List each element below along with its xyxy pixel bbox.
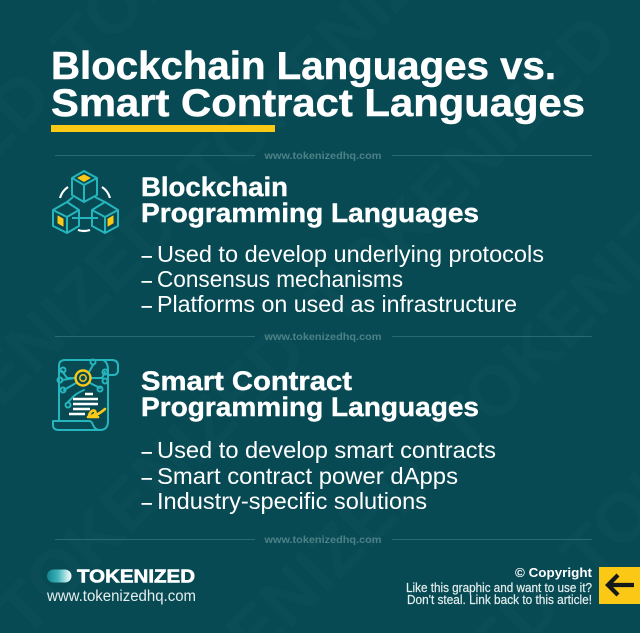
text block: blockchain bullets: Platforms on used as infrastructure <box>157 291 517 317</box>
text block: blockchain bullets: Used to develop underlying protocols <box>157 241 544 267</box>
heading: blockchain programming languages: Programming Languages <box>141 198 479 228</box>
copyright notice <box>406 565 593 607</box>
title: Blockchain Languages vs. <box>51 45 556 88</box>
heading: smart contract programming languages <box>141 366 479 422</box>
title underline <box>51 125 275 132</box>
heading: blockchain programming languages <box>141 172 479 228</box>
heading: smart contract programming languages: Programming Languages <box>141 392 479 422</box>
heading: smart contract programming languages: Smart Contract <box>141 366 352 396</box>
text block: blockchain bullets: Consensus mechanisms <box>157 266 403 292</box>
icon: logo mark <box>47 570 72 582</box>
text block: smart contract bullets <box>142 437 496 514</box>
icon: connected blocks <box>53 171 118 233</box>
website url: www.tokenizedhq.com <box>46 588 196 605</box>
copyright notice: Like this graphic and want to use it? <box>406 581 592 595</box>
heading: blockchain programming languages: Blockchain <box>141 172 288 202</box>
icon: smart contract scroll <box>53 360 118 430</box>
logo: tokenized: TOKENIZED <box>77 566 195 586</box>
divider with url 2: www.tokenizedhq.com <box>263 332 382 343</box>
text block: smart contract bullets: Industry-specific solutions <box>157 488 427 514</box>
text block: blockchain bullets <box>142 241 544 317</box>
divider with url 1: www.tokenizedhq.com <box>263 151 382 162</box>
divider with url 3: www.tokenizedhq.com <box>263 535 382 546</box>
title: Smart Contract Languages <box>51 82 585 125</box>
text block: smart contract bullets: Smart contract power dApps <box>157 463 458 489</box>
copyright notice: © Copyright <box>515 565 593 580</box>
arrow button <box>599 567 640 604</box>
text block: smart contract bullets: Used to develop smart contracts <box>157 437 496 463</box>
title <box>51 45 585 125</box>
copyright notice: Don't steal. Link back to this article! <box>407 593 592 607</box>
